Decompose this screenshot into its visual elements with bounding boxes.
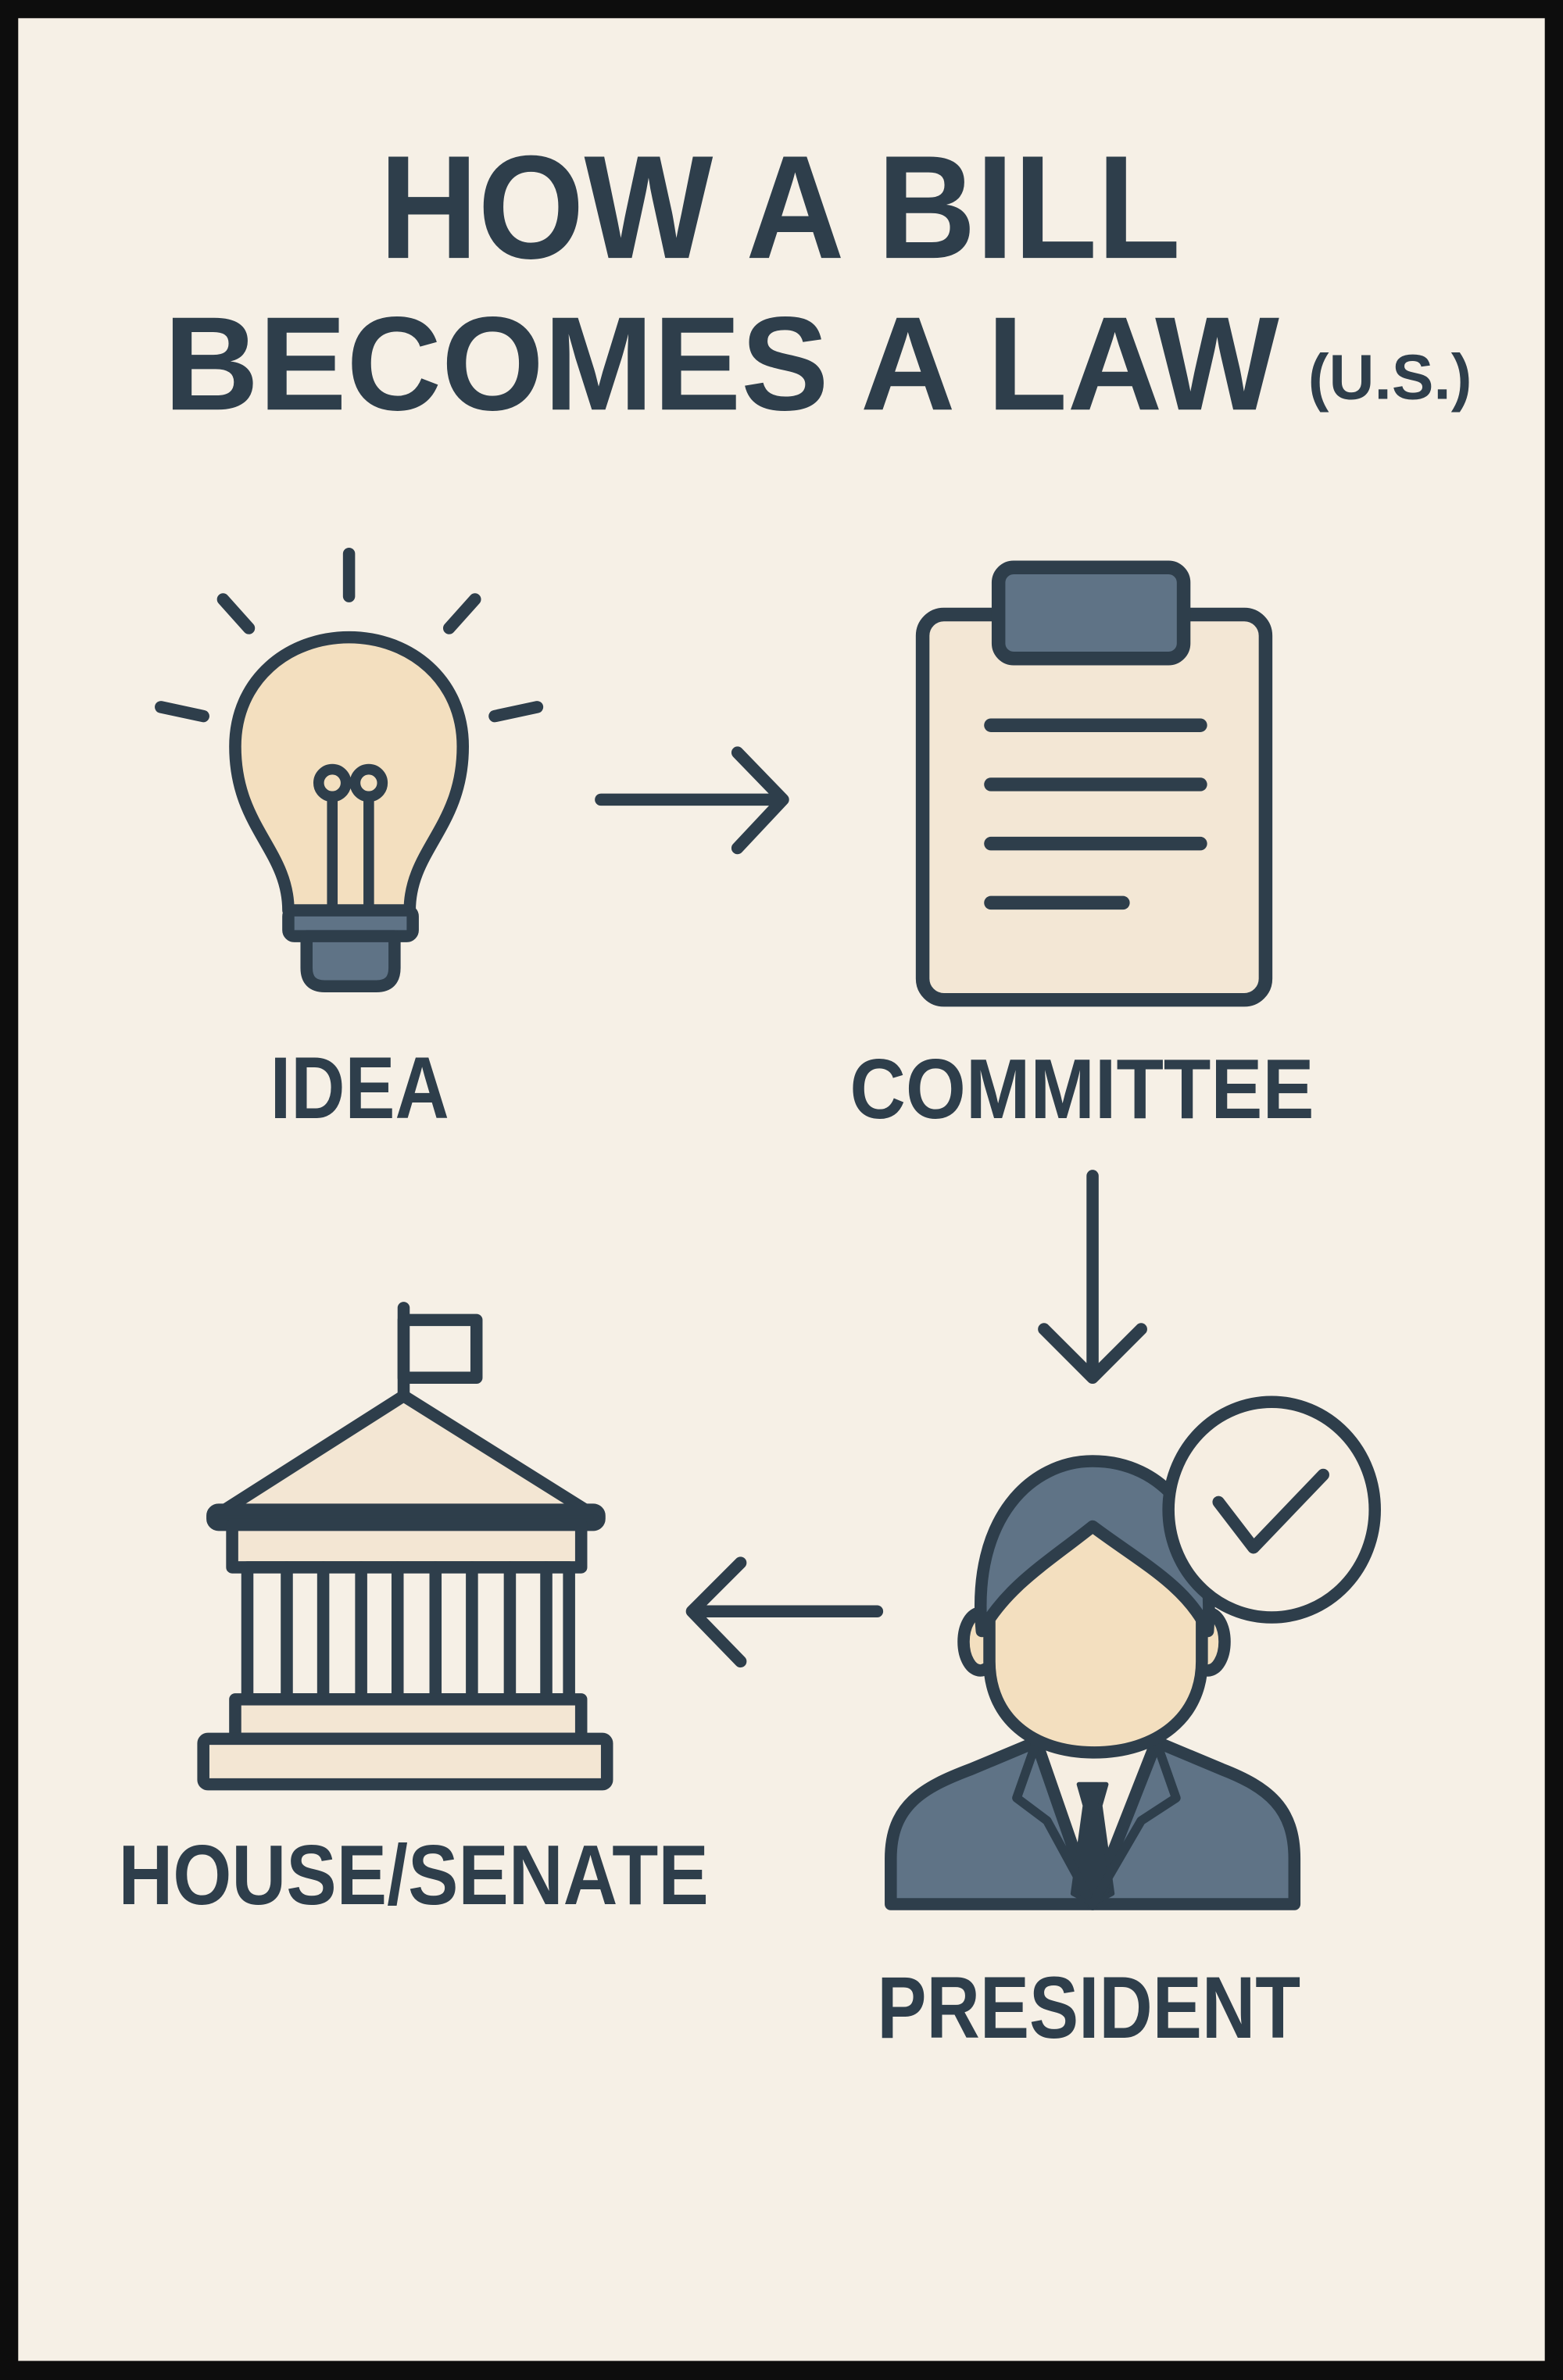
icon: capitol building (house/senate) bbox=[203, 1308, 607, 1785]
ears bbox=[964, 1613, 997, 1671]
arrow: idea to committee bbox=[601, 752, 783, 848]
label: idea: IDEA bbox=[270, 1038, 449, 1137]
label: president: PRESIDENT bbox=[877, 1958, 1300, 2057]
label: house/senate: HOUSE/SENATE bbox=[118, 1828, 709, 1923]
icon: president with check bbox=[891, 1402, 1375, 1904]
title bbox=[164, 124, 1472, 438]
icon: clipboard (committee) bbox=[923, 567, 1265, 1000]
arrow: committee to president bbox=[1044, 1176, 1141, 1378]
arrow: president to house/senate bbox=[692, 1563, 877, 1661]
title: (U.S.) bbox=[1308, 342, 1472, 413]
hair bbox=[981, 1461, 1209, 1631]
face bbox=[989, 1502, 1202, 1753]
icon: light bulb (idea) bbox=[161, 554, 537, 986]
body bbox=[891, 1742, 1294, 1904]
label: committee: COMMITTEE bbox=[849, 1042, 1314, 1137]
title: BECOMES A LAW bbox=[164, 289, 1280, 438]
title: HOW A BILL bbox=[379, 124, 1181, 289]
check circle bbox=[1168, 1402, 1375, 1617]
